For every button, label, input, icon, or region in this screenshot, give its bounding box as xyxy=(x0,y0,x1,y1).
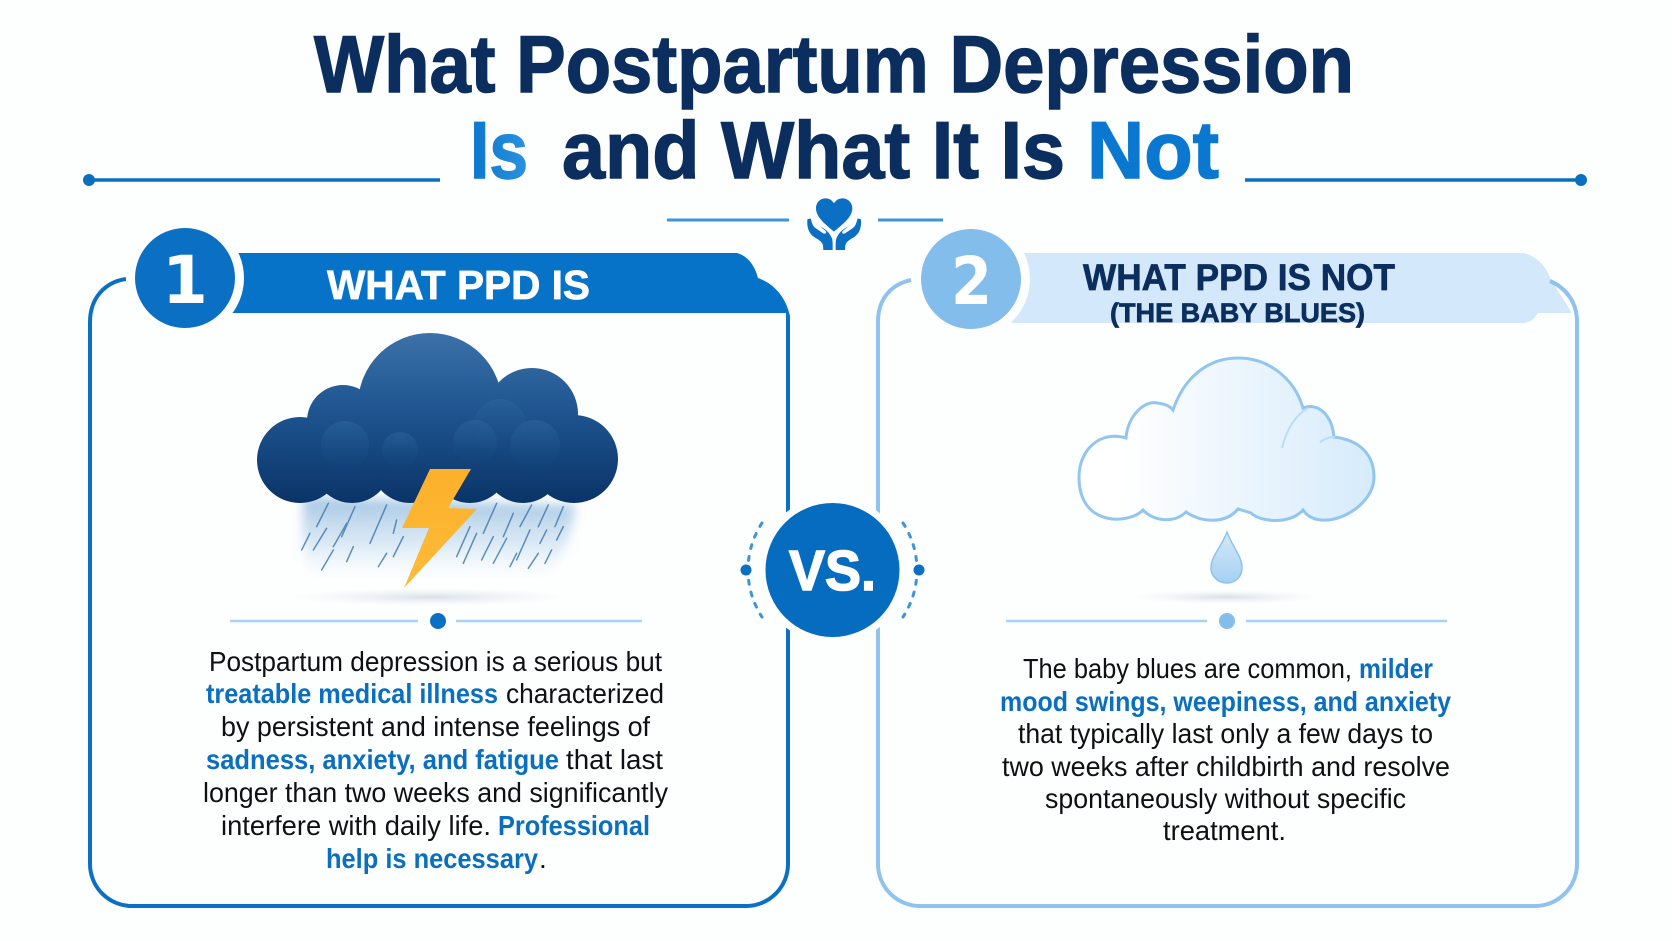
panel outline xyxy=(90,279,788,906)
body text: sadness, anxiety, and fatigue xyxy=(206,744,559,775)
body text xyxy=(203,646,668,874)
divider xyxy=(1006,613,1447,629)
VS. badge: VS. xyxy=(789,539,876,603)
body text: . xyxy=(539,843,547,874)
banner xyxy=(225,253,790,322)
body text: mood swings, weepiness, and anxiety xyxy=(1000,686,1451,717)
body text: characterized xyxy=(506,678,664,709)
title: What Postpartum Depression xyxy=(314,20,1354,110)
banner heading: WHAT PPD IS NOT xyxy=(1083,257,1395,298)
banner heading: (THE BABY BLUES) xyxy=(1110,298,1365,328)
body text: that last xyxy=(566,744,663,775)
badge 1 xyxy=(126,219,244,337)
banner xyxy=(1012,253,1572,323)
body text: The baby blues are common, xyxy=(1023,653,1352,684)
badge 1: 1 xyxy=(162,242,208,319)
title: Not xyxy=(1087,106,1219,196)
body text: two weeks after childbirth and resolve xyxy=(1002,751,1450,782)
panel: what PPD is xyxy=(90,219,790,906)
body text: longer than two weeks and significantly xyxy=(203,777,668,808)
divider xyxy=(230,613,642,629)
title: and What It Is xyxy=(562,106,1065,196)
icon: heart in cupped hands xyxy=(807,198,861,250)
banner heading: WHAT PPD IS xyxy=(327,262,590,308)
icon: light cloud with single drop xyxy=(1079,358,1374,604)
body text: that typically last only a few days to xyxy=(1018,718,1433,749)
badge 2 xyxy=(912,220,1030,338)
body text: milder xyxy=(1359,653,1433,684)
banner heading xyxy=(1083,257,1395,328)
body text: Professional xyxy=(498,810,650,841)
body text xyxy=(1000,653,1451,846)
VS. badge xyxy=(740,496,924,644)
body text: spontaneously without specific xyxy=(1045,783,1406,814)
panel: what PPD is not xyxy=(878,220,1577,906)
badge 2: 2 xyxy=(951,243,992,320)
body text: interfere with daily life. xyxy=(221,810,491,841)
body text: by persistent and intense feelings of xyxy=(221,711,650,742)
body text: Postpartum depression is a serious but xyxy=(209,646,662,677)
title: Is xyxy=(470,106,528,196)
title xyxy=(314,20,1354,196)
body text: help is necessary xyxy=(326,843,538,874)
body text: treatment. xyxy=(1163,815,1286,846)
body text: treatable medical illness xyxy=(206,678,498,709)
icon: storm cloud with lightning and rain xyxy=(257,333,618,606)
panel outline xyxy=(878,280,1577,906)
